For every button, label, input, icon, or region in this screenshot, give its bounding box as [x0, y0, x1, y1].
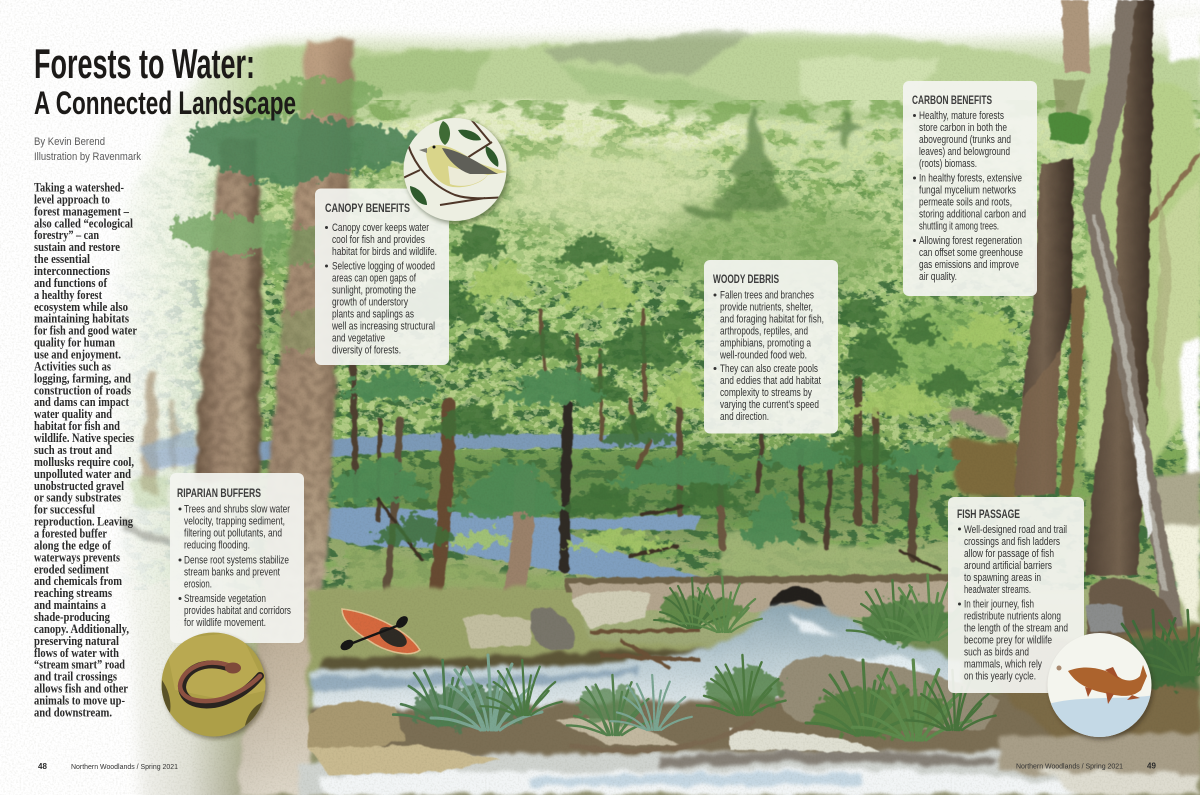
panel: woody debris: WOODY DEBRIS [713, 272, 779, 286]
icon: leaping trout [1045, 630, 1155, 740]
intro body text: and functions of [34, 276, 108, 290]
panel: riparian buffers: Dense root systems stabilize [184, 555, 289, 567]
riverside ground [350, 407, 1018, 590]
intro body text: and chemicals from [34, 574, 122, 588]
intro body text: and maintains a [34, 598, 107, 612]
intro body text: a forested buffer [34, 526, 107, 540]
panel: canopy benefits: cool for fish and provides [332, 234, 425, 246]
intro body text: interconnections [34, 264, 110, 278]
byline: By Kevin Berend [34, 136, 105, 148]
intro body text: a healthy forest [34, 288, 103, 302]
panel: woody debris [704, 260, 838, 434]
intro body text: reproduction. Leaving [34, 514, 134, 528]
intro body text: mollusks require cool, [34, 455, 134, 469]
panel: woody debris: and direction. [720, 411, 769, 423]
main stream [300, 605, 1200, 795]
tree trunks: left pair [194, 40, 354, 795]
intro body text: forest management – [34, 204, 130, 218]
panel: woody debris: arthropods, reptiles, and [720, 326, 808, 338]
title: A Connected Landscape [34, 85, 296, 121]
panel: fish passage: become prey for wildlife [964, 635, 1052, 647]
panel: fish passage [948, 497, 1084, 693]
intro body text: level approach to [34, 192, 110, 206]
intro body text: construction of roads [34, 383, 131, 397]
panel: fish passage: the length of the stream and [964, 623, 1068, 635]
panel: carbon benefits: permeate soils and roots, [919, 197, 1012, 209]
intro body text: ecosystem while also [34, 300, 128, 314]
grass tufts [393, 575, 1200, 740]
intro body text: logging, farming, and [34, 371, 131, 385]
panel: woody debris: and foraging habitat for fish, [720, 314, 824, 326]
panel: woody debris: amphibians, promoting a [720, 338, 811, 350]
panel: fish passage: such as birds and [964, 647, 1029, 659]
canopy over left trees [172, 78, 425, 352]
midground foliage clusters [321, 225, 1026, 550]
panel: canopy benefits: habitat for birds and wildlife. [332, 246, 437, 258]
intro body text: for successful [34, 503, 95, 517]
panel: fish passage: headwater streams. [964, 584, 1031, 596]
distant wooded hills [150, 30, 1200, 150]
panel: fish passage: Well-designed road and trail [964, 524, 1067, 536]
intro body text: or sandy substrates [34, 491, 121, 505]
intro body text: and downstream. [34, 705, 112, 719]
intro body text: quality for human [34, 336, 115, 350]
panel: carbon benefits: aboveground (trunks and [919, 134, 1011, 146]
icon: red-backed salamander [160, 630, 270, 740]
intro body text: the essential [34, 252, 90, 266]
panel: woody debris: Fallen trees and branches [720, 290, 814, 302]
panel: carbon benefits: can offset some greenhouse [919, 247, 1023, 259]
intro body text: such as trout and [34, 443, 112, 457]
intro body text: Taking a watershed- [34, 180, 124, 194]
icon: red kayak with paddle [339, 609, 420, 654]
panel: fish passage: redistribute nutrients along [964, 611, 1061, 623]
panel: fish passage: In their journey, fish [964, 599, 1034, 611]
intro body text: use and enjoyment. [34, 348, 121, 362]
footer: left folio: 48 [38, 762, 47, 771]
intro body text: “stream smart” road [34, 658, 125, 672]
panel: canopy benefits: Selective logging of wooded [332, 260, 435, 272]
mid forest canopy wash [0, 100, 1200, 590]
intro body text: and dams can impact [34, 395, 130, 409]
panel: canopy benefits: CANOPY BENEFITS [325, 201, 410, 215]
panel: fish passage: allow for passage of fish [964, 548, 1054, 560]
intro body text: unobstructed gravel [34, 479, 124, 493]
intro body text: sustain and restore [34, 240, 120, 254]
stone bridge [565, 574, 958, 618]
intro body text: preserving natural [34, 634, 119, 648]
faint trees and washes in the margin [122, 370, 196, 548]
panel: canopy benefits [315, 188, 449, 365]
panel: riparian buffers: erosion. [184, 579, 212, 591]
intro body text: canopy. Additionally, [34, 622, 129, 636]
panel: riparian buffers: reducing flooding. [184, 540, 250, 552]
ground and banks [308, 588, 1200, 740]
intro body text: waterways prevents [34, 550, 120, 564]
panel: fish passage: FISH PASSAGE [957, 507, 1020, 521]
panel: riparian buffers: provides habitat and corridors [184, 605, 291, 617]
panel: carbon benefits: gas emissions and improve [919, 259, 1019, 271]
byline: Illustration by Ravenmark [34, 151, 142, 163]
panel: fish passage: on this yearly cycle. [964, 671, 1036, 683]
intro body text: habitat for fish and [34, 419, 120, 433]
panel: woody debris: and eddies that add habitat [720, 375, 821, 387]
footer: left folio: Northern Woodlands / Spring 2021 [71, 762, 178, 771]
panel: carbon benefits: Healthy, mature forests [919, 110, 1004, 122]
panel: riparian buffers: for wildlife movement. [184, 617, 266, 629]
panel: carbon benefits: (roots) biomass. [919, 158, 977, 170]
panel: carbon benefits: store carbon in both the [919, 122, 1007, 134]
intro body text: reaching streams [34, 586, 112, 600]
intro body text: unpolluted water and [34, 467, 131, 481]
intro body text: forestry” – can [34, 228, 99, 242]
byline [34, 136, 142, 163]
intro body text: eroded sediment [34, 562, 110, 576]
panel: carbon benefits: storing additional carbon and [919, 209, 1026, 221]
panel: carbon benefits: fungal mycelium networks [919, 185, 1016, 197]
intro body text: and trail crossings [34, 670, 117, 684]
panel: canopy benefits: and vegetative [332, 332, 385, 344]
title: Forests to Water: [34, 40, 255, 87]
midground trunks [353, 310, 940, 628]
right side wash [1085, 15, 1200, 625]
panel: riparian buffers: velocity, trapping sediment, [184, 516, 285, 528]
intro body text: shade-producing [34, 610, 111, 624]
intro body text: along the edge of [34, 538, 112, 552]
intro body text: flows of water with [34, 646, 119, 660]
panel: fish passage: to spawning areas in [964, 572, 1041, 584]
panel: riparian buffers: Trees and shrubs slow water [184, 504, 290, 516]
panel: canopy benefits: growth of understory [332, 296, 409, 308]
panel: riparian buffers: filtering out pollutants, and [184, 528, 282, 540]
shrub masses [410, 594, 1200, 736]
panel: woody debris: well-rounded food web. [719, 350, 807, 362]
intro body text: water quality and [34, 407, 112, 421]
panel: carbon benefits: CARBON BENEFITS [912, 93, 992, 107]
panel: canopy benefits: well as increasing structural [331, 320, 435, 332]
panel: canopy benefits: diversity of forests. [332, 344, 401, 356]
rocks and logs [308, 591, 1125, 775]
panel: fish passage: mammals, which rely [964, 659, 1043, 671]
panel: canopy benefits: sunlight, promoting the [332, 284, 416, 296]
tree trunks: right side [1014, 0, 1200, 640]
panel: riparian buffers [170, 473, 304, 643]
panel: riparian buffers: Streamside vegetation [184, 593, 266, 605]
intro body text: also called “ecological [34, 216, 133, 230]
panel: carbon benefits: In healthy forests, extensive [919, 173, 1022, 185]
panel: woody debris: provide nutrients, shelter, [720, 302, 813, 314]
intro body text: animals to move up- [34, 694, 125, 708]
intro body text [34, 180, 137, 719]
panel: carbon benefits: air quality. [919, 271, 957, 283]
panel: canopy benefits: Canopy cover keeps water [332, 222, 429, 234]
panel: carbon benefits: Allowing forest regeneration [919, 235, 1022, 247]
intro body text: wildlife. Native species [34, 431, 134, 445]
panel: woody debris: complexity to streams by [720, 387, 813, 399]
icon: distant spruce trees [680, 100, 866, 222]
distant stream [152, 432, 712, 584]
intro body text: Activities such as [34, 360, 111, 374]
icon: songbird on branch [400, 115, 510, 225]
intro body text: maintaining habitats [34, 312, 129, 326]
panel: carbon benefits: leaves) and belowground [919, 146, 1010, 158]
panel: woody debris: varying the current’s speed [720, 399, 819, 411]
footer: right folio: 49 [1147, 762, 1156, 770]
footer: right folio: Northern Woodlands / Spring 2021 [1016, 762, 1123, 770]
panel: fish passage: around artificial barriers [964, 560, 1052, 572]
title [34, 40, 296, 121]
panel: canopy benefits: plants and saplings as [332, 308, 414, 320]
panel: fish passage: crossings and fish ladders [964, 536, 1060, 548]
panel: riparian buffers: RIPARIAN BUFFERS [177, 486, 261, 500]
panel: riparian buffers: stream banks and prevent [184, 567, 280, 579]
panel: carbon benefits [903, 81, 1037, 296]
panel: woody debris: They can also create pools [720, 363, 818, 375]
intro body text: allows fish and other [34, 682, 128, 696]
panel: canopy benefits: areas can open gaps of [332, 272, 416, 284]
panel: carbon benefits: shuttling it among trees. [919, 221, 999, 233]
intro body text: for fish and good water [34, 324, 137, 338]
